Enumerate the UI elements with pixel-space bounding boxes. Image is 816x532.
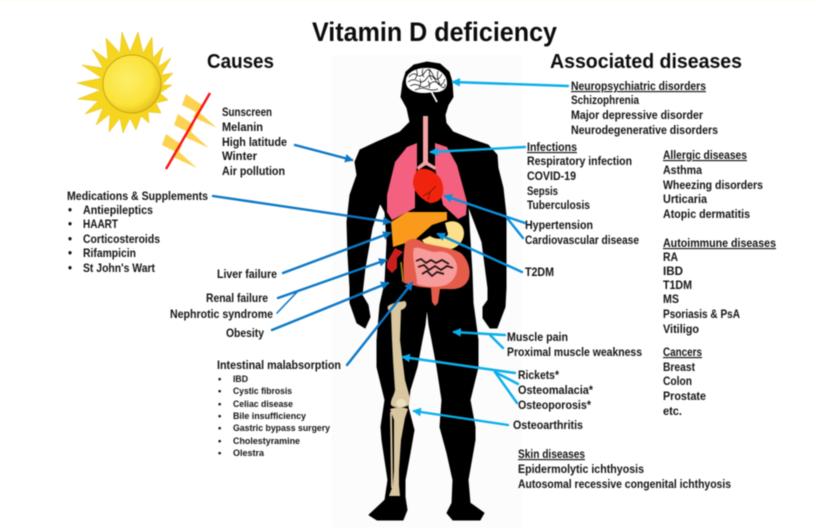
- intestinal malabsorption: Bile insufficiency: [233, 411, 307, 422]
- title: Vitamin D deficiency: [312, 17, 557, 47]
- autoimmune diseases: Vitiligo: [663, 324, 699, 336]
- cancers: etc.: [663, 406, 682, 418]
- label: osteoarthritis: Osteoarthritis: [513, 420, 583, 432]
- muscle labels: Proximal muscle weakness: [507, 347, 642, 359]
- intestinal malabsorption: •: [218, 386, 222, 397]
- medications and supplements: Antiepileptics: [83, 205, 153, 217]
- muscle labels: [507, 332, 642, 359]
- cardiovascular labels: [525, 220, 639, 247]
- infections: Infections: [527, 142, 577, 154]
- label: T2DM: T2DM: [525, 267, 554, 279]
- skin diseases: Skin diseases: [518, 449, 585, 461]
- allergic diseases: Atopic dermatitis: [663, 209, 750, 221]
- cancers: Cancers: [663, 347, 702, 359]
- bone: tibia and fibula: [389, 408, 408, 496]
- intestinal malabsorption: •: [218, 423, 222, 434]
- arrows: associated diseases: [403, 82, 568, 425]
- medications and supplements: HAART: [83, 219, 118, 231]
- causes list: Air pollution: [222, 166, 285, 178]
- cardiovascular labels: Hypertension: [525, 220, 593, 232]
- bone: patella: [396, 399, 406, 407]
- organ: brain: [406, 68, 447, 102]
- icon: sun: [77, 32, 173, 133]
- bone labels: Osteomalacia*: [518, 385, 593, 397]
- allergic diseases: Wheezing disorders: [663, 180, 763, 192]
- organ: kidney: [387, 248, 403, 282]
- label: obesity: Obesity: [226, 328, 265, 340]
- medications and supplements: Corticosteroids: [83, 234, 160, 246]
- intestinal malabsorption: Gastric bypass surgery: [233, 423, 331, 434]
- organ: trachea: [417, 116, 436, 170]
- cancers: [663, 347, 706, 418]
- heading: associated diseases: Associated diseases: [550, 51, 742, 73]
- label: liver failure: Liver failure: [217, 269, 277, 281]
- autoimmune diseases: IBD: [663, 266, 683, 278]
- autoimmune diseases: MS: [663, 294, 679, 306]
- label: nephrotic syndrome: Nephrotic syndrome: [170, 309, 273, 321]
- organ: stomach: [422, 221, 464, 250]
- medications and supplements: •: [68, 248, 72, 260]
- autoimmune diseases: Psoriasis & PsA: [663, 309, 740, 321]
- intestinal malabsorption: Cholestyramine: [233, 436, 300, 447]
- intestinal malabsorption: •: [218, 399, 222, 410]
- allergic diseases: Allergic diseases: [663, 150, 747, 162]
- neuropsychiatric disorders: Major depressive disorder: [571, 110, 703, 122]
- causes list: High latitude: [222, 137, 287, 149]
- medications and supplements: •: [68, 263, 72, 275]
- cancers: Breast: [663, 362, 695, 374]
- medications and supplements: Rifampicin: [83, 248, 136, 260]
- intestinal malabsorption: •: [218, 436, 222, 447]
- cardiovascular labels: Cardiovascular disease: [525, 235, 639, 247]
- arrows: organ associations: [438, 196, 525, 272]
- autoimmune diseases: [663, 238, 776, 336]
- medications and supplements: •: [68, 219, 72, 231]
- bone labels: Rickets*: [518, 370, 559, 382]
- medications and supplements: •: [68, 234, 72, 246]
- skin diseases: [518, 449, 731, 491]
- cancers: Prostate: [663, 391, 706, 403]
- neuropsychiatric disorders: Neurodegenerative disorders: [571, 125, 718, 137]
- label: renal failure: Renal failure: [206, 293, 268, 305]
- autoimmune diseases: RA: [663, 252, 678, 264]
- causes list: Sunscreen: [222, 107, 272, 119]
- intestinal malabsorption: •: [218, 374, 222, 385]
- medications and supplements: [67, 191, 208, 275]
- medications and supplements: St John's Wart: [83, 263, 155, 275]
- skin diseases: Autosomal recessive congenital ichthyosis: [518, 479, 731, 491]
- organ: intestines: [403, 239, 470, 306]
- intestinal malabsorption: •: [218, 411, 222, 422]
- heading: causes: Causes: [207, 51, 274, 73]
- organ: lungs: [387, 143, 467, 220]
- allergic diseases: Asthma: [663, 165, 703, 177]
- infections: Tuberculosis: [527, 200, 590, 212]
- body silhouette: [347, 62, 506, 520]
- arrows: causes: [213, 145, 412, 365]
- bone labels: Osteoporosis*: [518, 400, 591, 412]
- neuropsychiatric disorders: Neuropsychiatric disorders: [571, 81, 706, 93]
- icon: blocked sun rays: [162, 93, 217, 169]
- skin diseases: Epidermolytic ichthyosis: [518, 464, 644, 476]
- allergic diseases: [663, 150, 763, 221]
- autoimmune diseases: Autoimmune diseases: [663, 238, 776, 250]
- allergic diseases: Urticaria: [663, 194, 708, 206]
- causes list: Melanin: [222, 122, 263, 134]
- intestinal malabsorption: Olestra: [233, 448, 265, 459]
- intestinal malabsorption: IBD: [233, 374, 248, 385]
- autoimmune diseases: T1DM: [663, 280, 692, 292]
- causes list: [222, 107, 287, 178]
- organ: liver: [391, 212, 447, 247]
- bone labels: [518, 370, 593, 412]
- intestinal malabsorption: [217, 360, 341, 459]
- infections: [527, 142, 632, 212]
- muscle labels: Muscle pain: [507, 332, 568, 344]
- organ: heart: [413, 169, 443, 203]
- cancers: Colon: [663, 376, 692, 388]
- neuropsychiatric disorders: [571, 81, 718, 137]
- neuropsychiatric disorders: Schizophrenia: [571, 95, 640, 107]
- infections: Respiratory infection: [527, 156, 632, 168]
- medications and supplements: Medications & Supplements: [67, 191, 208, 203]
- causes list: Winter: [222, 151, 258, 163]
- intestinal malabsorption: Intestinal malabsorption: [217, 360, 341, 372]
- infections: COVID-19: [527, 171, 576, 183]
- intestinal malabsorption: •: [218, 448, 222, 459]
- bone: femur: [388, 301, 410, 408]
- infections: Sepsis: [527, 186, 558, 198]
- intestinal malabsorption: Celiac disease: [233, 399, 293, 410]
- intestinal malabsorption: Cystic fibrosis: [233, 386, 292, 397]
- medications and supplements: •: [68, 205, 72, 217]
